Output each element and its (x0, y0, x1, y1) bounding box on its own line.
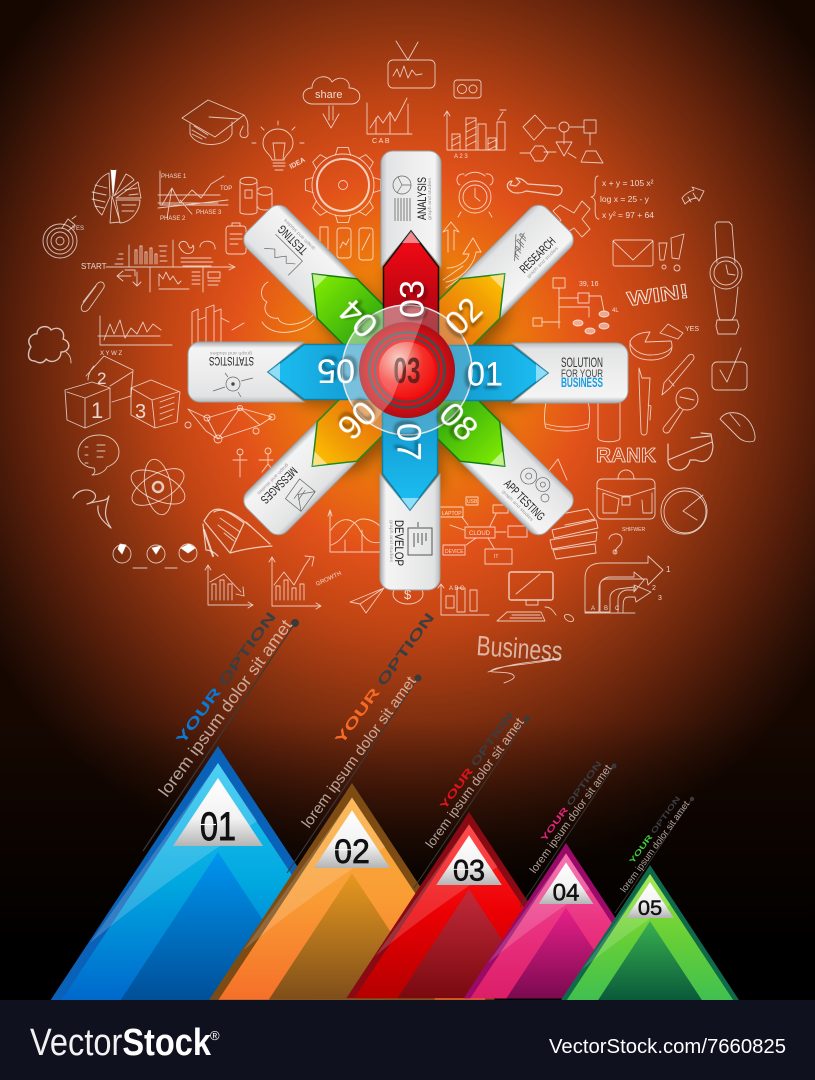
title: solution: SOLUTION (561, 354, 603, 370)
button number: 03 (394, 350, 420, 391)
doodle: wave chart (328, 510, 381, 552)
triangle 03: red (346, 812, 592, 998)
title: develop: DEVELOP (392, 520, 406, 566)
caption: testing: graph and studies (282, 217, 316, 251)
doodle: hatched bar chart: A 2 3 (454, 154, 468, 160)
arm 06: messages (239, 376, 403, 540)
triangle 05: green: 05 (638, 897, 662, 920)
doodle: small pie charts (113, 544, 197, 568)
caption: develop: graph and studies (389, 520, 394, 563)
doodle: area chart: C A B (372, 138, 390, 145)
number 04: 04 (332, 291, 386, 345)
arm 03: analysis (381, 151, 441, 335)
footer bar (0, 1000, 815, 1080)
doodle: org flow chart: 39, 16 (579, 281, 599, 288)
doodle: number cross (552, 201, 590, 237)
arm 08: app testing (414, 376, 578, 540)
doodle: wrench (507, 178, 562, 195)
doodle: mouse (720, 413, 755, 442)
doodle: equations: x + y = 105 x² (602, 178, 654, 188)
doodle: dice cubes: 1 (91, 398, 103, 423)
doodle: line chart with phases: TOP (220, 186, 232, 192)
doodle: start timeline (81, 240, 235, 292)
option label 03 (414, 710, 530, 888)
icon: testing chart (261, 234, 302, 275)
triangle 04: pink (464, 843, 668, 999)
number 05: 05 (317, 352, 355, 390)
doodle: three arrows: A (591, 606, 595, 612)
arm 01: solution for your business (444, 343, 628, 403)
lower background fade (0, 720, 815, 935)
option label 04: YOUR OPTION (539, 759, 604, 843)
doodle: magnifier (663, 388, 698, 433)
caption: app testing: graph and studies (501, 489, 535, 523)
doodle: line chart with phases: PHASE 2 (160, 216, 186, 222)
triangle 05: green (561, 865, 739, 1000)
title: testing: TESTING (275, 222, 310, 258)
doodle: dollar tag (393, 584, 423, 604)
icon: develop monitor (408, 522, 432, 555)
doodle: spiral target (43, 216, 84, 258)
icon: gears (517, 463, 558, 504)
doodle: dice cubes: 3 (135, 401, 146, 423)
doodle: hatched bar chart (444, 110, 506, 160)
caption: research: graph and studies (526, 245, 560, 279)
caption: statistics: graph and studies (209, 351, 252, 356)
option label 05: lorem ipsum dolor sit amet (619, 799, 692, 895)
title: messages: MESSAGES (258, 464, 300, 506)
doodle: sprout cloud (261, 282, 314, 332)
doodle: rising chart: GROWTH (315, 571, 343, 588)
doodle: question mark (609, 527, 645, 554)
doodle: cloud network: LAPTOP (442, 511, 462, 517)
number 02: 02 (438, 290, 490, 343)
option label 02: lorem ipsum dolor sit amet (298, 673, 420, 831)
doodle: exclamations (659, 234, 684, 271)
doodle: hand arrows (443, 222, 481, 288)
doodle: cylinders (240, 177, 272, 214)
doodle: light bulb (252, 121, 307, 171)
doodle: triangle cone (548, 459, 567, 480)
doodle: three arrows: C (615, 606, 620, 612)
option label 02 (287, 610, 437, 873)
doodle: question mark: SHIFWER (622, 527, 645, 533)
doodle: line chart left: X Y W Z (100, 351, 122, 357)
icon: research chart (502, 229, 535, 263)
doodle: cloud network (440, 497, 527, 564)
option label 03: lorem ipsum dolor sit amet (422, 715, 527, 851)
doodle: cloud network: CLOUD (469, 531, 491, 537)
doodle: three arrows: 1 (666, 565, 671, 574)
doodle: three arrows: B (604, 606, 608, 612)
arm 05: statistics (188, 342, 372, 402)
doodle: share cloud: share (315, 89, 343, 101)
doodle: small hatched arrow (682, 187, 704, 204)
doodle: flow diagram (520, 115, 603, 163)
glass highlight wedge (342, 306, 426, 424)
doodle: equations: log x = 25 - y (600, 194, 650, 204)
doodle: WIN text: WIN! (626, 281, 690, 311)
doodle: spiral target: YES (72, 226, 84, 232)
doodle: glasses (668, 433, 713, 470)
doodle: line chart left (98, 316, 172, 357)
number 03: 03 (394, 280, 432, 318)
icon: analysis pie and bars (393, 176, 411, 221)
doodle: wristwatch (710, 222, 742, 334)
doodle: tv (388, 41, 435, 88)
triangle 02: orange (209, 783, 495, 1000)
number 07: 07 (390, 423, 428, 461)
doodle: Business lettering: Business (476, 630, 564, 667)
doodle: bars 3D (192, 305, 244, 345)
option label 01 (143, 609, 299, 851)
doodle: wall clock (661, 488, 707, 534)
doodle: line chart with phases: PHASE 1 (161, 174, 187, 180)
number 08: 08 (431, 395, 485, 449)
doodle: computer (497, 572, 575, 623)
doodle: 3d bars: A B C (449, 586, 465, 592)
doodle: line chart with phases: PHASE 3 (196, 210, 222, 216)
doodle: equations (591, 176, 654, 220)
triangle 03: red: 03 (453, 856, 485, 888)
registered mark: ® (210, 1028, 220, 1043)
doodle: rising chart (269, 556, 343, 609)
doodle: alarm clock (457, 172, 493, 217)
doodle: paper plane (350, 588, 384, 613)
doodle: line chart with phases (158, 171, 232, 222)
option label 02: YOUR OPTION (331, 610, 437, 747)
doodle: three arrows: 3 (658, 595, 662, 602)
arm 02: research (414, 200, 578, 364)
doodle: org flow chart (533, 278, 619, 334)
doodle: start timeline: START (81, 262, 107, 271)
doodle: equations: x y² = 97 + 64 (602, 210, 654, 220)
doodle: dollar tag: $ (404, 587, 412, 602)
icon: statistics gear (213, 373, 253, 397)
title: app testing: APP TESTING (501, 477, 548, 523)
doodle: chip (544, 402, 620, 442)
arm 04: testing (239, 200, 403, 364)
caption: analysis: graph and studies (427, 177, 432, 220)
option label 05: YOUR OPTION (627, 794, 682, 865)
doodle: open book (203, 509, 272, 556)
title: analysis: ANALYSIS (415, 177, 429, 220)
doodle: org flow chart: 4L (612, 308, 619, 314)
doodle: cloud network: DEVICE (445, 549, 464, 555)
number 06: 06 (330, 393, 383, 447)
doodle: person figures (233, 448, 274, 477)
glass disc and red button (341, 304, 473, 436)
title: statistics: STATISTICS (209, 354, 254, 368)
doodle: pencil (662, 354, 694, 395)
option label 03: YOUR OPTION (438, 710, 516, 812)
doodle: gear (305, 147, 381, 223)
doodle: RANK text: RANK (596, 445, 657, 467)
doodle: paperclip (81, 282, 104, 312)
glass disc (342, 305, 472, 435)
triangle 01: blue (50, 746, 386, 1001)
doodle: pen (639, 368, 651, 435)
doodle: three arrows (585, 556, 671, 613)
doodle: share cloud (303, 77, 360, 128)
doodle: book stack (550, 509, 598, 559)
doodle: hatched pie (92, 170, 141, 223)
caption: messages: graph and studies (256, 463, 290, 496)
doodle: briefcase (597, 470, 655, 519)
title: for your: FOR YOUR (561, 368, 603, 380)
arm 07: develop (380, 406, 440, 590)
doodle: phone icons (320, 227, 373, 260)
option label 04: lorem ipsum dolor sit amet (528, 763, 614, 876)
doodle: dice cubes (65, 356, 180, 428)
soft shadow behind wheel (274, 238, 554, 518)
footer logo: VectorStock (30, 1022, 212, 1064)
doodle: Business lettering (476, 630, 564, 683)
triangle 04: pink: 04 (553, 879, 579, 906)
doodle: question three (73, 490, 111, 528)
doodle: 3d bars (438, 584, 489, 615)
doodle: area chart (367, 98, 412, 145)
icon: message envelope (283, 477, 318, 513)
doodle: cloud network: IT (494, 554, 498, 560)
footer url: VectorStock.com/7660825 (549, 1036, 786, 1058)
doodle: falling chart (205, 565, 253, 608)
option label 01: YOUR OPTION (172, 609, 279, 747)
triangle 01: blue: 01 (200, 805, 236, 849)
doodle: dice cubes: 2 (97, 369, 106, 388)
option label 01: lorem ipsum dolor sit amet (155, 616, 296, 800)
doodle: graduation cap (182, 100, 248, 144)
doodle: atom (126, 457, 190, 517)
doodle: 3d pie: YES (685, 326, 699, 333)
doodle: speech bubble (78, 435, 119, 475)
triangle 02: orange: 02 (334, 833, 370, 871)
red button (359, 322, 455, 418)
doodle: three arrows: 2 (652, 585, 656, 592)
wheel numerals (317, 280, 503, 461)
title: business: BUSINESS (561, 374, 603, 390)
doodle: network diagram (185, 406, 275, 443)
doodle: light bulb: IDEA (289, 157, 307, 171)
doodle: clipboard (226, 223, 246, 254)
doodle: check box (712, 348, 747, 390)
number 01: 01 (467, 356, 503, 394)
doodle: envelope (613, 240, 653, 266)
option label 04 (520, 759, 616, 907)
doodle: thought cloud (28, 327, 71, 363)
title: research: RESEARCH (517, 234, 558, 276)
doodle: cloud network: USB (467, 499, 478, 505)
doodle sketches around the wheel (28, 41, 755, 683)
doodle: 3d pie (630, 324, 699, 360)
doodle: tape glasses (454, 80, 481, 98)
